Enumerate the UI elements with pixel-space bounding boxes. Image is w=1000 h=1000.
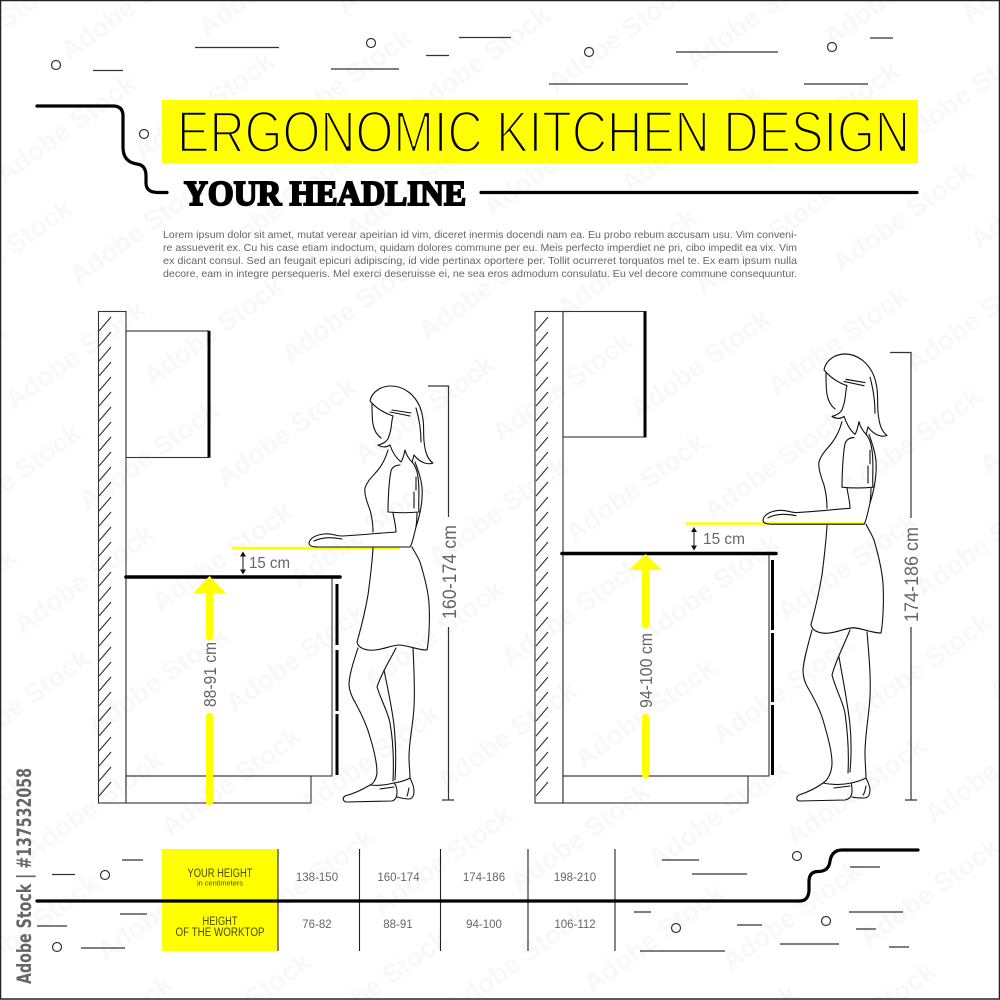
right base cabinet and plinth: [563, 553, 772, 803]
stock credit: Adobe Stock | #137532058: [13, 768, 36, 984]
left woman legs: [343, 648, 414, 802]
table values row 1: 174-186: [463, 872, 505, 884]
table row labels: [176, 868, 265, 939]
table values row 1: [296, 872, 596, 884]
left height label: 160-174 cm: [440, 525, 461, 619]
table grid lines: [278, 849, 615, 951]
right woman upper body: [763, 354, 887, 633]
left yellow height arrow: [193, 576, 226, 802]
table values row 1: 138-150: [296, 872, 338, 884]
left 15 cm label: 15 cm: [249, 555, 290, 572]
left 15 cm gap arrow: [240, 552, 246, 574]
right elbow level line: [686, 522, 864, 525]
table values row 1: 160-174: [377, 872, 420, 884]
table row labels: OF THE WORKTOP: [176, 927, 265, 939]
right wall cabinet: [563, 312, 646, 437]
bottom decorative lines and circles: [37, 852, 909, 952]
left elbow level line: [232, 547, 400, 549]
curved header rule: [37, 106, 917, 192]
intro paragraph: [163, 230, 797, 280]
curved footer rule: [37, 850, 918, 901]
right woman legs: [797, 630, 870, 801]
right worktop: [562, 552, 776, 555]
left kitchen section: [98, 312, 400, 803]
intro paragraph: ex dicant consul. Sed an feugait epicuri adipiscing, id vide pertinax oportere per. Tollit ocurreret torquatos mel te. Ex eam ipsum nulla: [163, 256, 797, 267]
table label cells: [162, 849, 278, 951]
intro paragraph: re assueverit ex. Cu his case etiam indoctum, quidam dolores commune per eu. Meis perfecto imperdiet ne pri, cibo impedit ea vix. Vim: [163, 243, 797, 254]
table row labels: in centimeters: [197, 880, 244, 888]
table values row 2: 88-91: [383, 919, 413, 931]
left wall cabinet: [126, 331, 209, 458]
left woman upper body: [309, 386, 433, 650]
table values row 1: 198-210: [554, 872, 596, 884]
table values row 2: 76-82: [302, 919, 332, 931]
table values row 2: 106-112: [554, 919, 596, 931]
right 15 cm label: 15 cm: [703, 531, 745, 548]
left worktop height label: 88-91 cm: [200, 642, 220, 707]
table values row 2: [302, 919, 596, 931]
right yellow height arrow: [629, 554, 662, 775]
top decorative lines and circles: [52, 38, 893, 84]
height table: [162, 849, 615, 951]
right woman figure: [763, 354, 887, 801]
left wall with hatching: [98, 312, 126, 803]
right height label: 174-186 cm: [902, 527, 923, 622]
headline: YOUR HEADLINE: [184, 175, 466, 213]
left worktop: [126, 575, 340, 579]
right wall with hatching: [535, 312, 563, 803]
right worktop height label: 94-100 cm: [636, 633, 656, 708]
left height dimension: [428, 386, 461, 800]
table row labels: HEIGHT: [202, 916, 238, 928]
left woman figure: [309, 386, 433, 802]
intro paragraph: Lorem ipsum dolor sit amet, mutat verear apeirian id vim, diceret inermis docendi nam ea. Eu probo rebum accusam usu. Vim conveni-: [163, 230, 797, 241]
table values row 2: 94-100: [466, 919, 502, 931]
left base cabinet and plinth: [126, 577, 337, 803]
right kitchen section: [535, 312, 864, 803]
right 15 cm gap arrow: [691, 527, 697, 550]
table row labels: YOUR HEIGHT: [188, 868, 252, 880]
intro paragraph: decore, eam in integre persequeris. Mel exerci deseruisse ei, ne sea eros admodum consulatu. Eu vel decore commune consequuntur.: [163, 269, 797, 280]
right height dimension: [890, 352, 923, 800]
